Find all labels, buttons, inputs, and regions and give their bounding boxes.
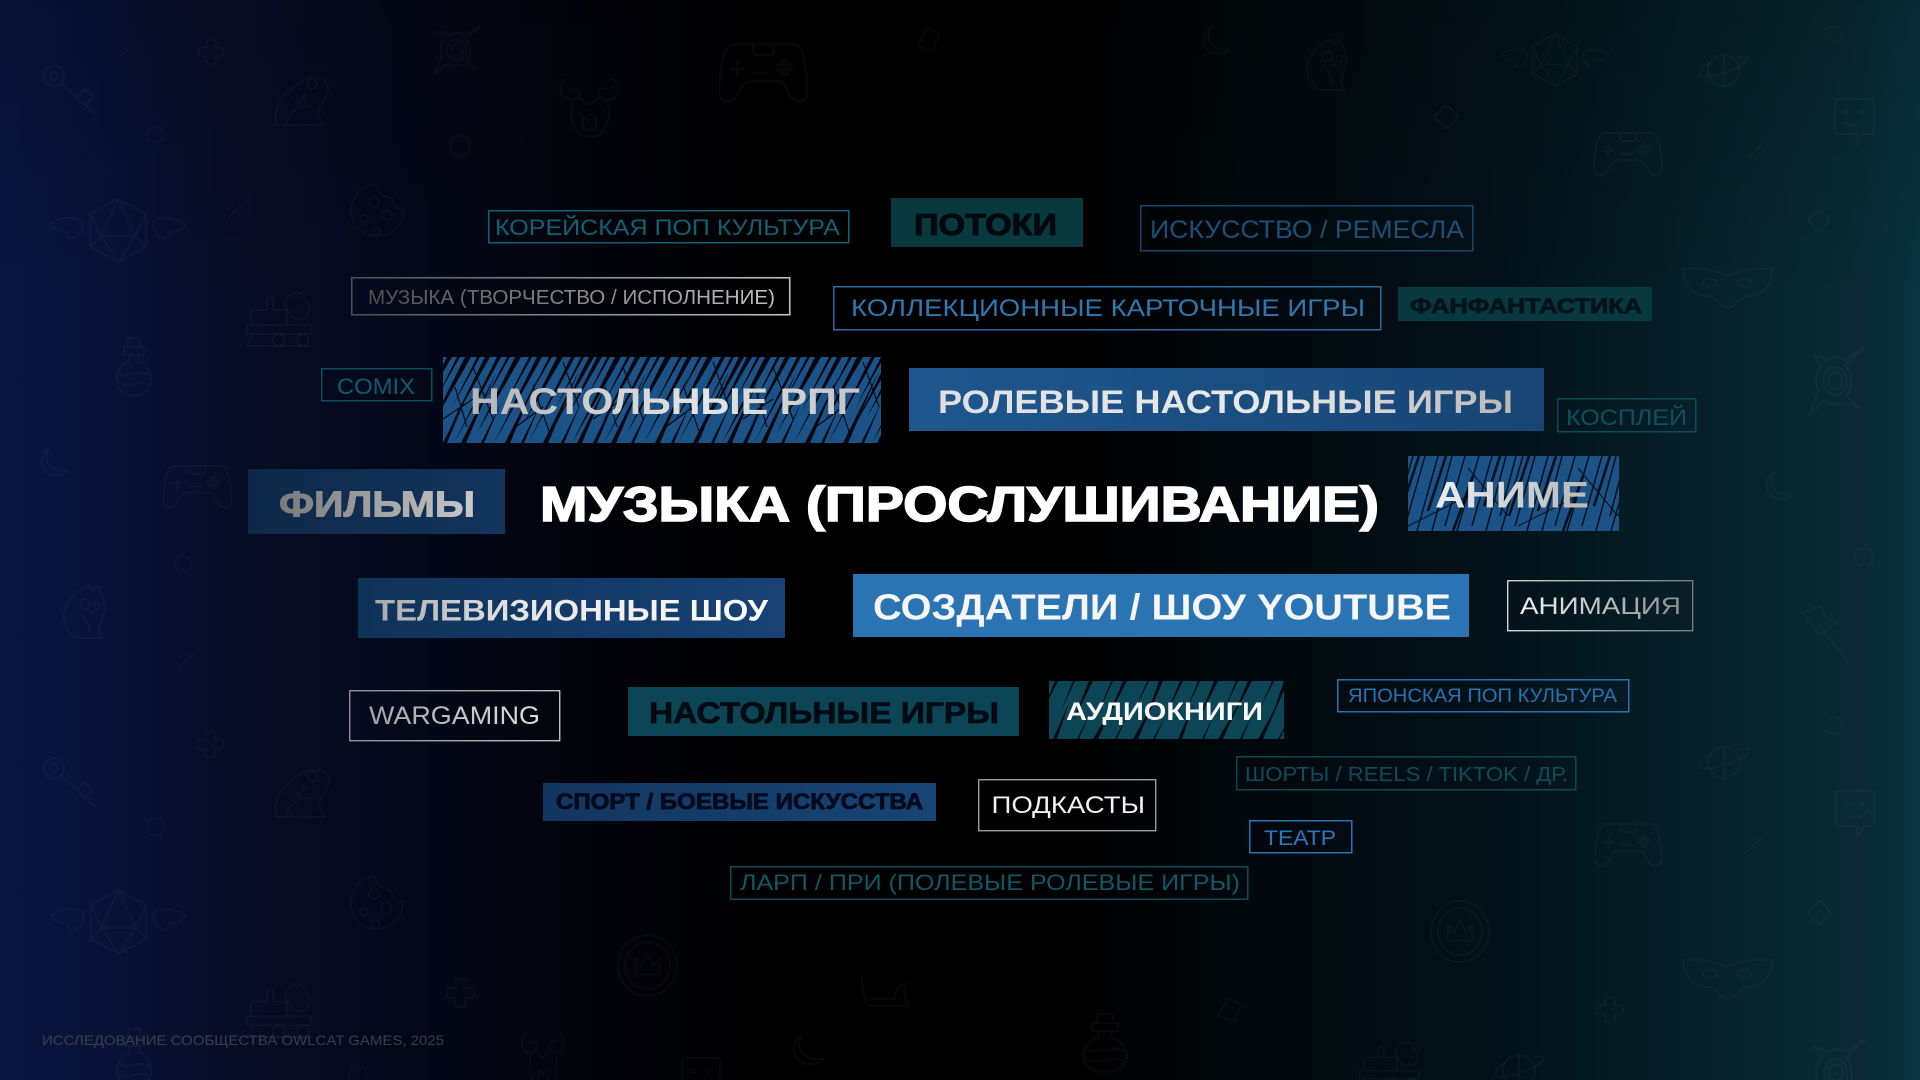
tag: театр	[1250, 821, 1352, 853]
tag: корейская поп культура	[489, 211, 849, 243]
icon: cat	[1307, 39, 1346, 90]
tag: потоки	[891, 198, 1083, 247]
tag: музыка (творчество / исполнение)	[352, 278, 790, 315]
icon: crown badge	[1431, 901, 1489, 962]
tag: настольные рпг: НАСТОЛЬНЫЕ РПГ	[470, 380, 860, 422]
tag: создатели / шоу youtube: СОЗДАТЕЛИ / ШОУ YOUTUBE	[873, 586, 1451, 628]
tag: фанфантастика: ФАНФАНТАСТИКА	[1410, 294, 1642, 318]
icon: plus outline	[447, 979, 474, 1007]
icon: slash	[1748, 838, 1761, 851]
icon: winged die	[1501, 34, 1609, 86]
icon: crown badge	[618, 935, 677, 996]
icon: dot	[175, 556, 192, 573]
icon: controller	[163, 466, 232, 507]
icon: plus	[199, 40, 223, 64]
icon: plus outline	[1597, 998, 1623, 1022]
tag: настольные рпг	[443, 357, 881, 443]
tag: анимация: АНИМАЦИЯ	[1520, 593, 1681, 620]
tag: аниме	[1408, 456, 1619, 531]
tag: аудиокниги	[1041, 681, 1290, 739]
tag: анимация	[1508, 581, 1693, 631]
icon: ring	[450, 135, 470, 156]
icon: moon	[42, 448, 68, 475]
icon: potion	[1083, 1014, 1127, 1072]
icon: burning train	[1360, 1041, 1419, 1080]
icon: dot	[147, 127, 163, 143]
icon: mask	[1683, 268, 1772, 308]
tag: спорт / боевые искусства	[543, 783, 936, 821]
icon: top controller	[719, 44, 808, 101]
icon: dot	[1855, 548, 1873, 566]
tag: косплей: КОСПЛЕЙ	[1566, 405, 1687, 430]
tag: потоки: ПОТОКИ	[914, 207, 1057, 242]
icon: chat smiley	[682, 1058, 720, 1080]
tag: comix: COMIX	[337, 374, 415, 399]
tag: спорт / боевые искусства: СПОРТ / БОЕВЫЕ ИСКУССТВА	[556, 789, 923, 814]
tag: телевизионные шоу: ТЕЛЕВИЗИОННЫЕ ШОУ	[375, 594, 768, 628]
icon: diamond	[1434, 105, 1459, 129]
tag: подкасты	[979, 780, 1156, 831]
icon: dot	[1826, 717, 1842, 735]
icon: winged die	[51, 890, 186, 954]
icon: plus	[198, 732, 223, 757]
icon: winged die	[50, 199, 186, 262]
tag: коллекционные карточные игры	[834, 287, 1381, 330]
icon: slash	[121, 43, 134, 56]
tag: ролевые настольные игры	[909, 368, 1544, 431]
icon: moon	[1204, 27, 1230, 54]
tag: настольные игры	[628, 687, 1019, 736]
icon: dot	[147, 818, 164, 836]
tag: театр: ТЕАТР	[1264, 827, 1336, 850]
tag: шорты / reels / tiktok / др.: ШОРТЫ / REELS / TIKTOK / ДР.	[1245, 764, 1568, 786]
icon: potion	[117, 1029, 151, 1080]
tag: телевизионные шоу	[358, 578, 785, 638]
tag: фильмы	[248, 469, 505, 534]
icon: compass star	[434, 26, 481, 74]
icon: slash	[1748, 145, 1761, 159]
tag: создатели / шоу youtube	[853, 574, 1469, 637]
icon: moon	[794, 1035, 824, 1064]
icon: burning train	[247, 291, 311, 346]
icon: dot	[349, 1066, 367, 1080]
tag: настольные игры: НАСТОЛЬНЫЕ ИГРЫ	[649, 697, 999, 730]
icon: axe	[1801, 606, 1849, 663]
icon: frog	[275, 769, 329, 817]
icon: key	[44, 758, 95, 807]
tag: ларп / при: ЛАРП / ПРИ (ПОЛЕВЫЕ РОЛЕВЫЕ ИГРЫ)	[740, 870, 1240, 895]
tag: искусство / ремесла: ИСКУССТВО / РЕМЕСЛА	[1150, 216, 1464, 244]
icon: cookie	[351, 876, 403, 929]
tag: косплей	[1558, 399, 1696, 432]
tag: японская поп культура	[1338, 680, 1629, 712]
tag: корейская поп культура: КОРЕЙСКАЯ ПОП КУЛЬТУРА	[495, 215, 840, 240]
tag: фанфантастика	[1398, 287, 1652, 321]
icon: diamond	[1808, 209, 1830, 232]
icon: moon	[1767, 472, 1793, 499]
icon: key	[44, 66, 95, 114]
icon: cookie	[351, 184, 404, 236]
icon: bull skull	[522, 1032, 564, 1080]
icon: compass star	[1809, 1039, 1865, 1080]
icon: frog	[275, 77, 328, 125]
icon: mask	[1683, 959, 1772, 999]
icon: cat	[64, 586, 104, 638]
icon: controller	[1594, 133, 1662, 175]
tag: comix	[322, 369, 432, 401]
tag: ролевые настольные игры: РОЛЕВЫЕ НАСТОЛЬНЫЕ ИГРЫ	[938, 384, 1513, 420]
tag: шорты / reels / tiktok / др.	[1237, 757, 1576, 790]
icon: controller	[1595, 824, 1662, 866]
icon: planet	[1699, 747, 1748, 778]
footer source note: ИССЛЕДОВАНИЕ СООБЩЕСТВА OWLCAT GAMES, 2025	[42, 1032, 444, 1048]
icon: potion	[117, 338, 151, 396]
icon: diamond	[1808, 900, 1831, 925]
icon: diamond outline	[1218, 998, 1241, 1022]
icon: bull skull	[560, 79, 619, 136]
icon: diamond outline	[918, 28, 939, 52]
icon: slash	[229, 204, 242, 217]
tag: подкасты: ПОДКАСТЫ	[992, 792, 1145, 819]
icon: chat smiley	[1836, 791, 1874, 836]
icon: burning train	[247, 983, 311, 1037]
icon: dot	[1826, 26, 1842, 43]
icon: planet	[1494, 1055, 1543, 1080]
icon: compass star	[1809, 347, 1864, 415]
icon: scroll	[862, 976, 909, 1006]
main heading: музыка (прослушивание): МУЗЫКА (ПРОСЛУШИВАНИЕ)	[540, 478, 1379, 532]
tag: wargaming: WARGAMING	[369, 702, 540, 730]
tag: музыка (творчество / исполнение): МУЗЫКА (ТВОРЧЕСТВО / ИСПОЛНЕНИЕ)	[368, 287, 775, 309]
icon: planet	[1699, 55, 1747, 86]
tag: фильмы: ФИЛЬМЫ	[279, 484, 475, 524]
tag: японская поп культура: ЯПОНСКАЯ ПОП КУЛЬТУРА	[1348, 685, 1617, 707]
tag: ларп / при	[731, 867, 1248, 899]
tag: аудиокниги: АУДИОКНИГИ	[1066, 698, 1263, 726]
icon: chat smiley	[1835, 99, 1874, 144]
tag: коллекционные карточные игры: КОЛЛЕКЦИОННЫЕ КАРТОЧНЫЕ ИГРЫ	[851, 295, 1365, 322]
tag: искусство / ремесла	[1141, 206, 1473, 251]
tag: аниме: АНИМЕ	[1435, 474, 1589, 516]
tag: wargaming	[350, 691, 560, 741]
icon: slash	[179, 654, 193, 667]
